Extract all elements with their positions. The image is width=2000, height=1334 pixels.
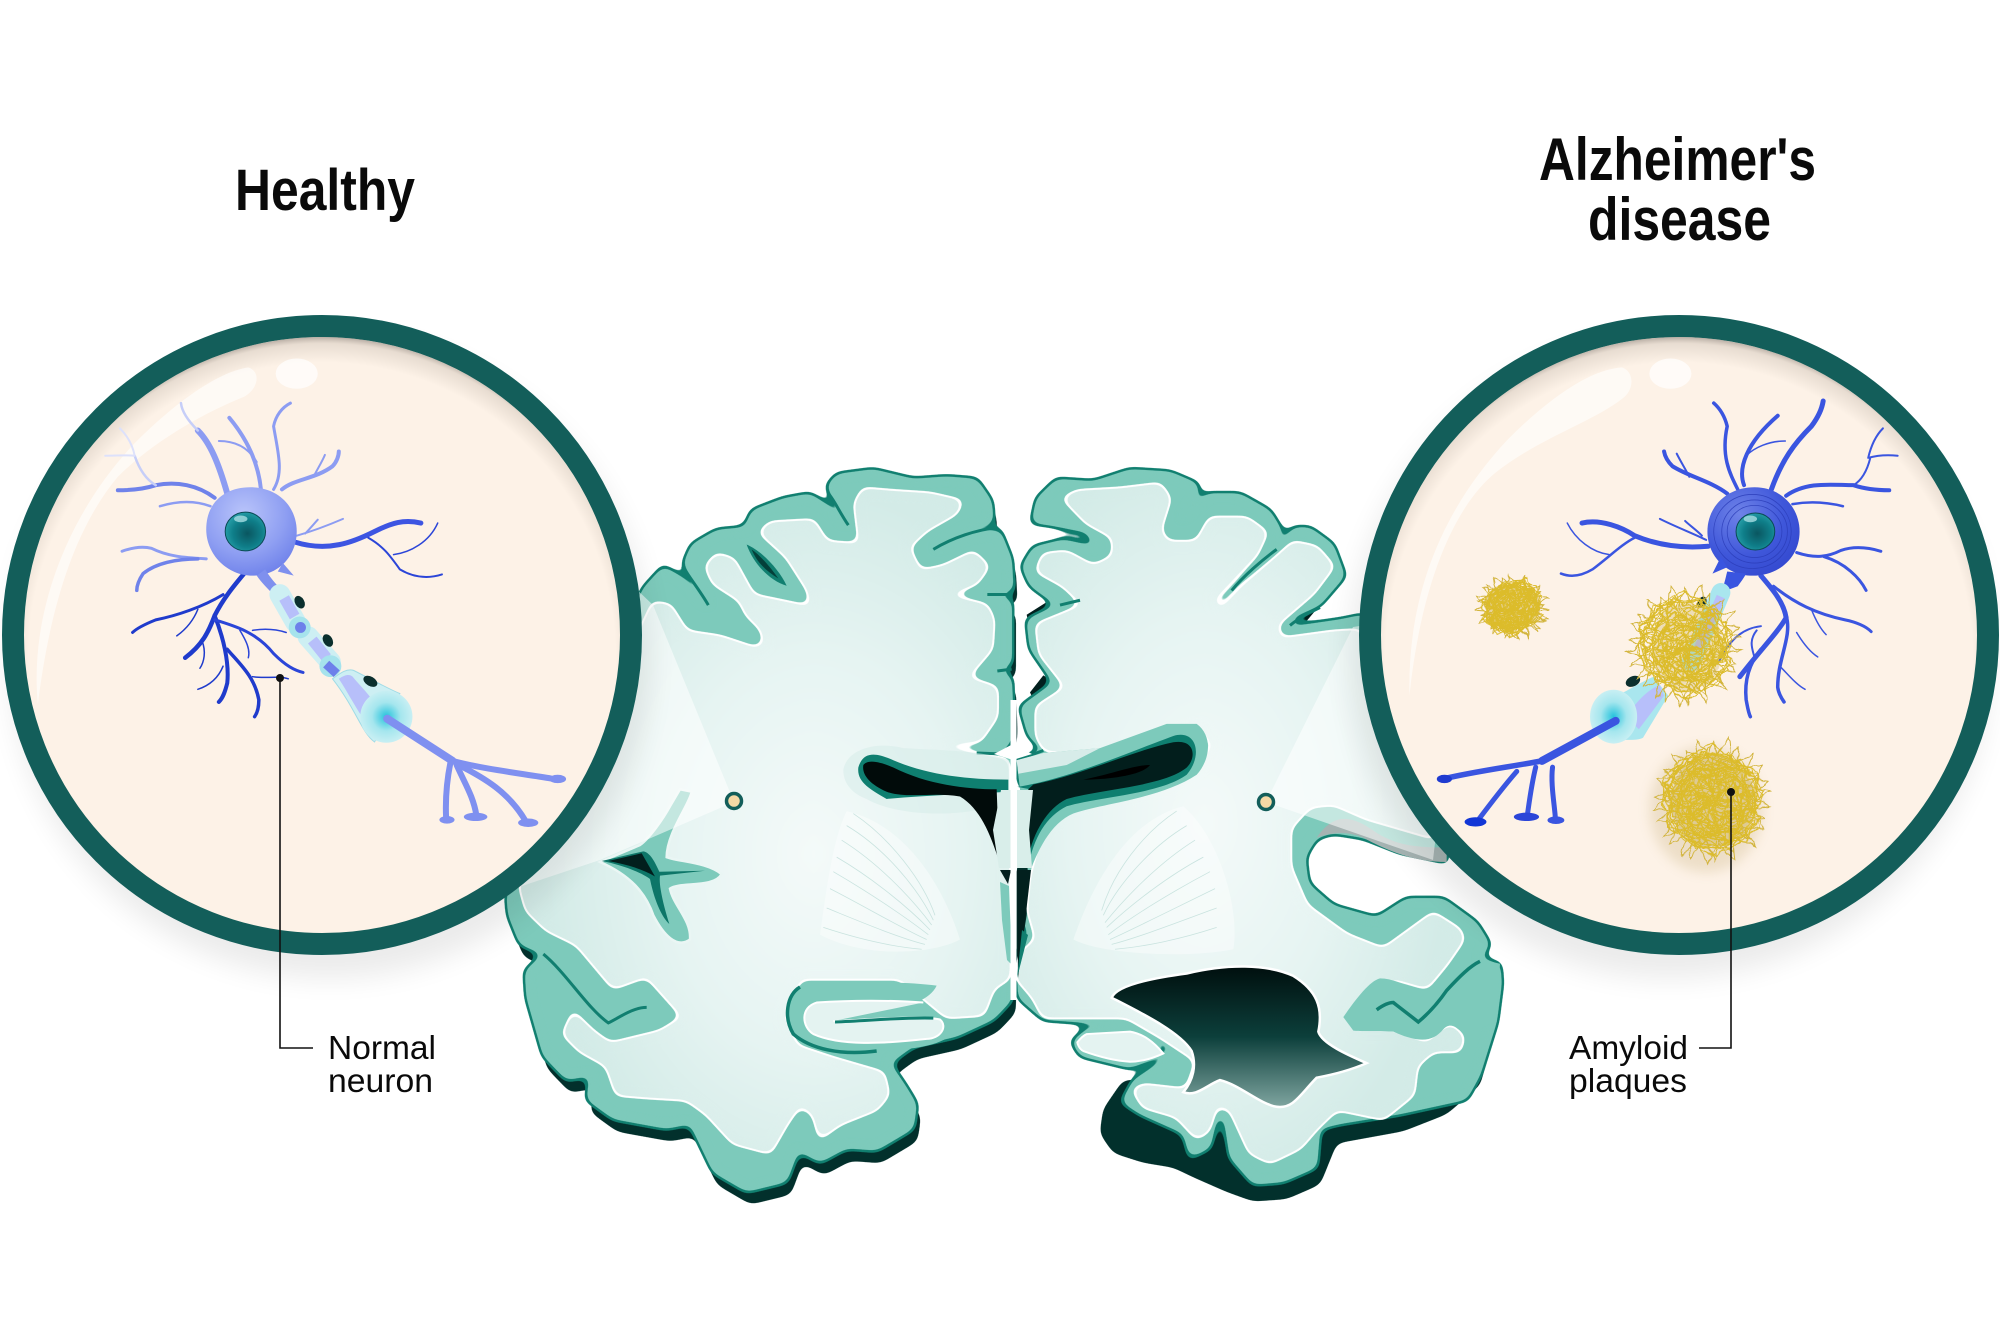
marker right bbox=[1258, 794, 1274, 810]
basal ganglia fan bbox=[820, 811, 960, 952]
neuron: affected bbox=[1437, 401, 1898, 882]
midline structures bbox=[993, 700, 1033, 1000]
neuron: normal bbox=[105, 403, 566, 827]
label: Amyloid plaques: plaques bbox=[1569, 1062, 1687, 1099]
hippocampal gyrus bbox=[788, 982, 957, 1053]
ventricle bbox=[1017, 724, 1208, 877]
axon terminal bbox=[1437, 721, 1616, 827]
magnification fan right bbox=[1266, 620, 1440, 860]
leader line: Amyloid plaques bbox=[1699, 788, 1735, 1048]
label: Normal neuron bbox=[328, 1029, 436, 1099]
circle shadow left bbox=[10, 338, 650, 978]
axon terminal bbox=[387, 719, 566, 827]
basal ganglia fan bbox=[1073, 806, 1235, 954]
temporal shadow bbox=[1317, 819, 1447, 862]
amyloid plaque on axon bbox=[1605, 565, 1763, 724]
tongue gyrus bbox=[1077, 1032, 1163, 1062]
brain: Alzheimer's right hemisphere bbox=[1017, 469, 1502, 1201]
leader line: Normal neuron bbox=[276, 674, 313, 1048]
soma bbox=[1707, 487, 1800, 576]
label: Normal neuron: Normal bbox=[328, 1029, 436, 1066]
magnifier panel: Alzheimer's bbox=[1370, 326, 1988, 944]
label: Amyloid plaques: Amyloid bbox=[1569, 1029, 1688, 1066]
title: Alzheimer's disease: disease bbox=[1588, 186, 1771, 253]
glass highlight bbox=[37, 359, 318, 704]
lateral sulcus bbox=[600, 789, 722, 943]
axon myelin bbox=[280, 594, 412, 743]
marker left bbox=[726, 794, 742, 808]
axon bbox=[1590, 593, 1721, 744]
amyloid plaque small bbox=[1465, 561, 1559, 653]
amyloid plaque large bbox=[1630, 718, 1793, 882]
title: Healthy: Healthy bbox=[235, 158, 415, 223]
label: Amyloid plaques bbox=[1569, 1029, 1688, 1099]
glass highlight bbox=[1409, 359, 1691, 696]
brain: healthy left hemisphere bbox=[507, 469, 1017, 1204]
magnifier panel: healthy bbox=[13, 326, 631, 944]
title: Alzheimer's disease bbox=[1539, 126, 1816, 253]
soma bbox=[206, 487, 297, 576]
circle shadow right bbox=[1350, 338, 1990, 978]
ventricle bbox=[843, 746, 1009, 862]
label: Normal neuron: neuron bbox=[328, 1062, 433, 1099]
title: Alzheimer's disease: Alzheimer's bbox=[1539, 126, 1816, 193]
enlarged ventricle bbox=[1112, 966, 1367, 1107]
magnification fan left bbox=[480, 586, 734, 900]
